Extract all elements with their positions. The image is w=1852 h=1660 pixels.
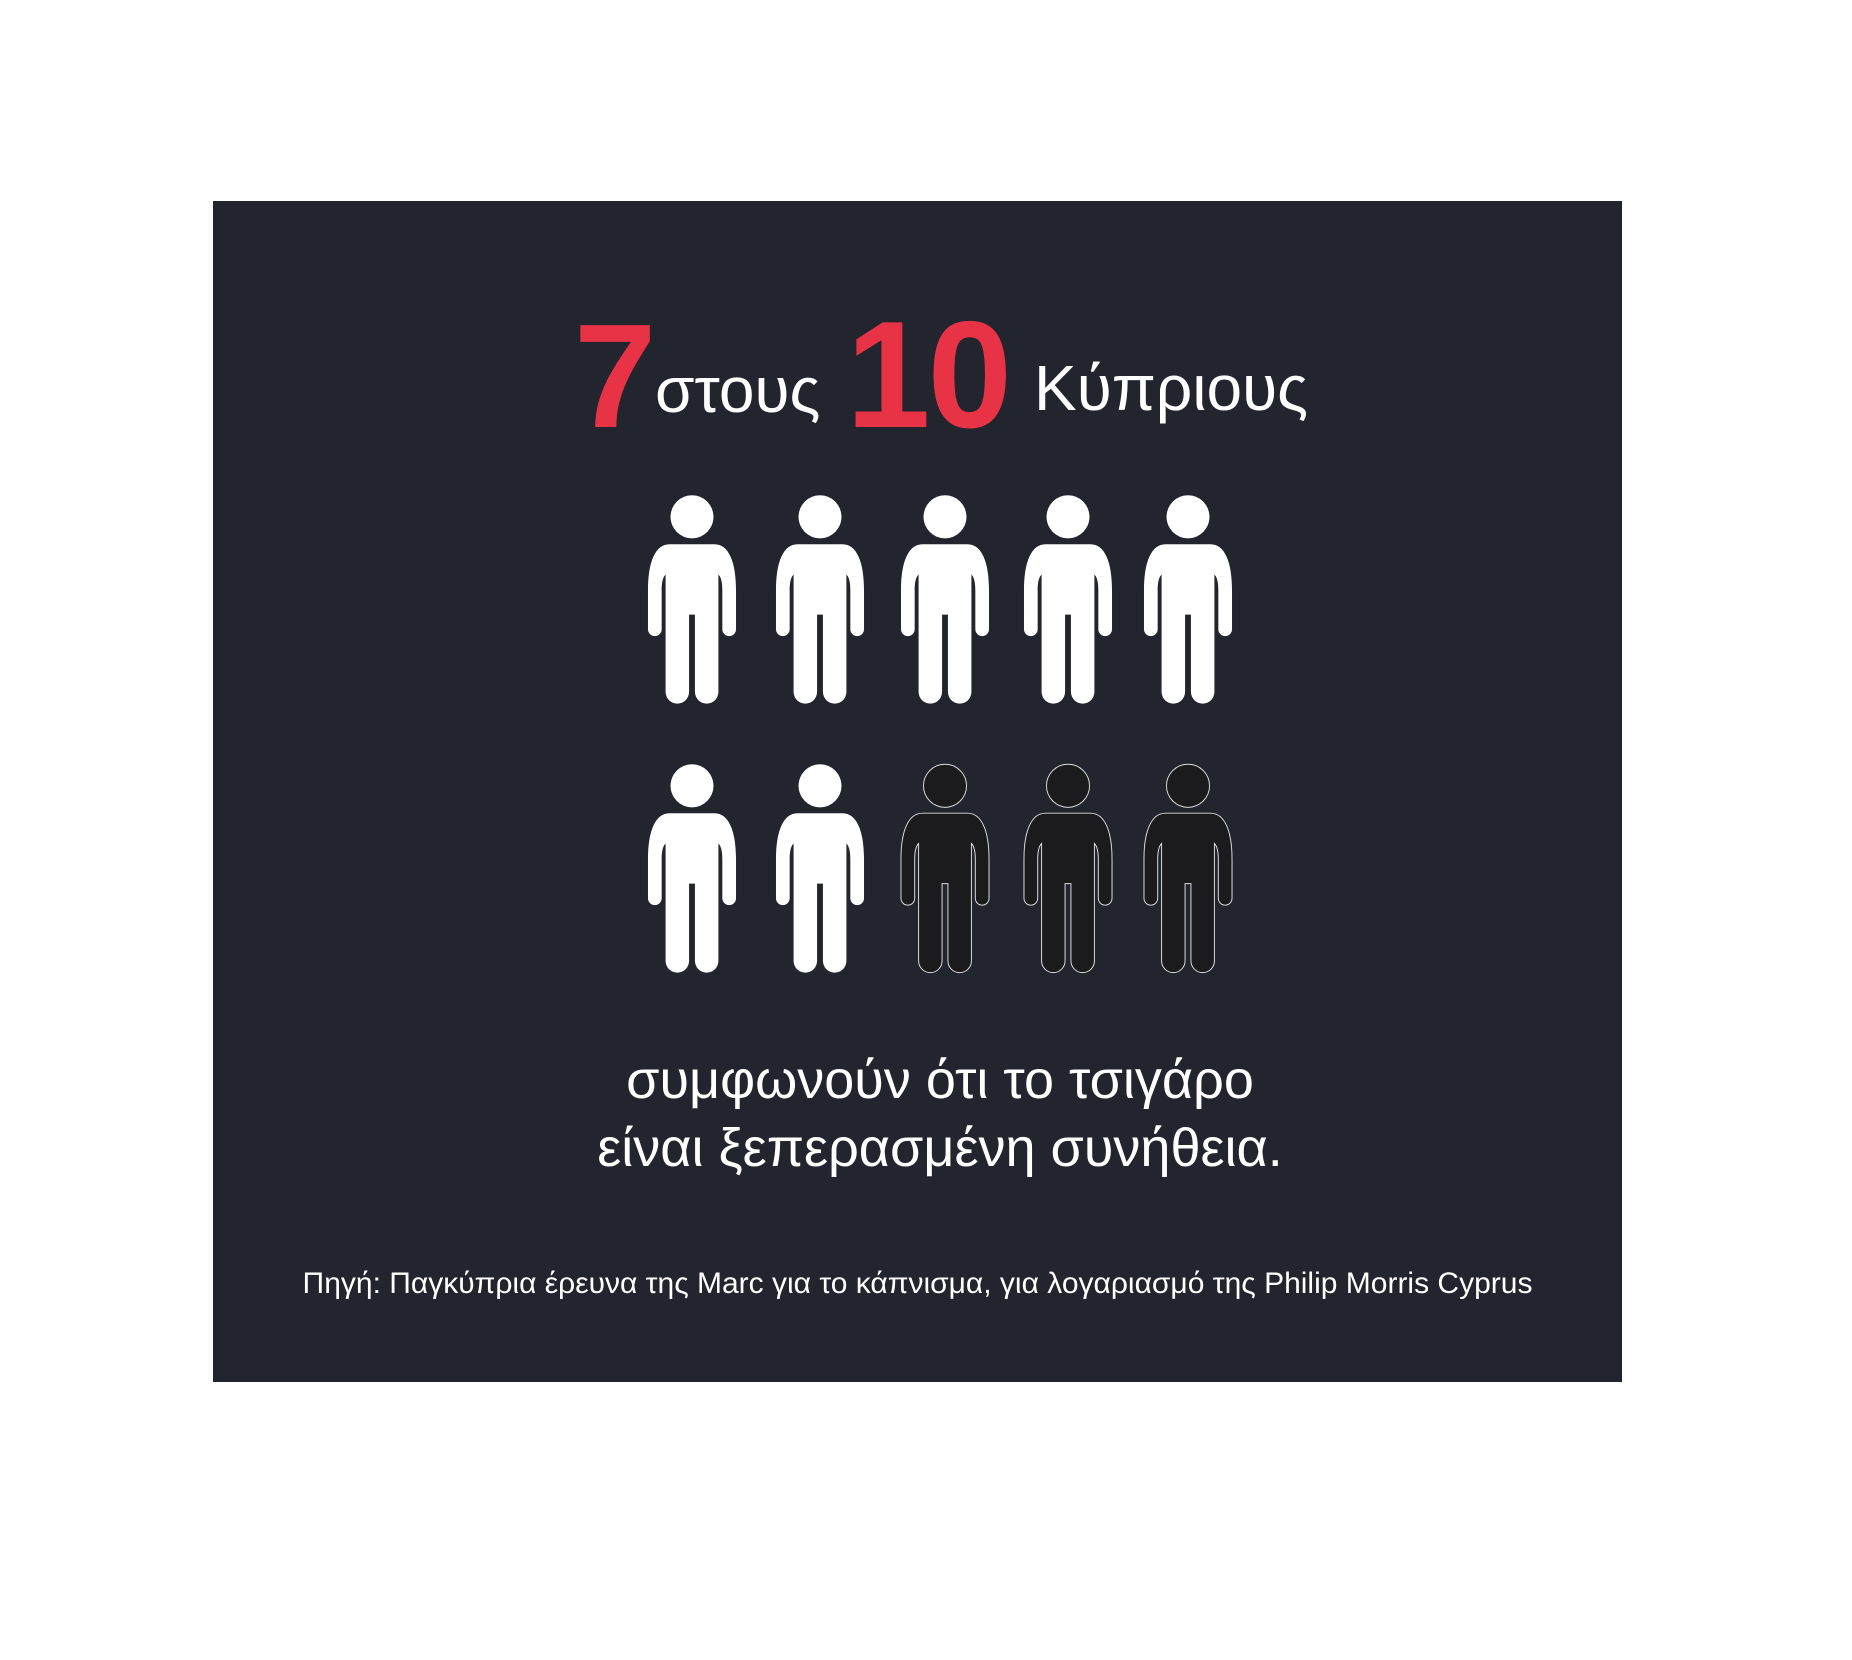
title	[574, 290, 1308, 460]
icon: person 7	[776, 764, 864, 973]
panel: main dark card	[213, 201, 1622, 1382]
icon: person 10 dark	[1144, 764, 1232, 974]
statement text	[597, 1050, 1283, 1178]
word: Κύπριους: Κύπριους	[1034, 352, 1308, 424]
word: στους: στους	[655, 354, 820, 426]
icon: person 4	[1024, 495, 1112, 704]
icon: person 8 dark	[900, 764, 990, 974]
source note: Πηγή: Παγκύπρια έρευνα της Marc για το κάπνισμα, για λογαριασμό της Philip Morris Cyprus	[303, 1267, 1532, 1300]
statement text: είναι ξεπερασμένη συνήθεια.	[597, 1118, 1283, 1178]
icon: person 9 dark	[1024, 764, 1112, 974]
pictogram: 10 people, 7 highlighted	[648, 495, 1232, 974]
icon: person 3	[900, 495, 990, 704]
big number 10: 10	[846, 290, 1009, 460]
icon: person 5	[1144, 495, 1232, 704]
icon: person 1	[648, 495, 736, 704]
icon: person 2	[776, 495, 864, 704]
statement text: συμφωνούν ότι το τσιγάρο	[626, 1050, 1254, 1110]
big number 7: 7	[574, 294, 656, 459]
icon: person 6	[648, 764, 736, 973]
